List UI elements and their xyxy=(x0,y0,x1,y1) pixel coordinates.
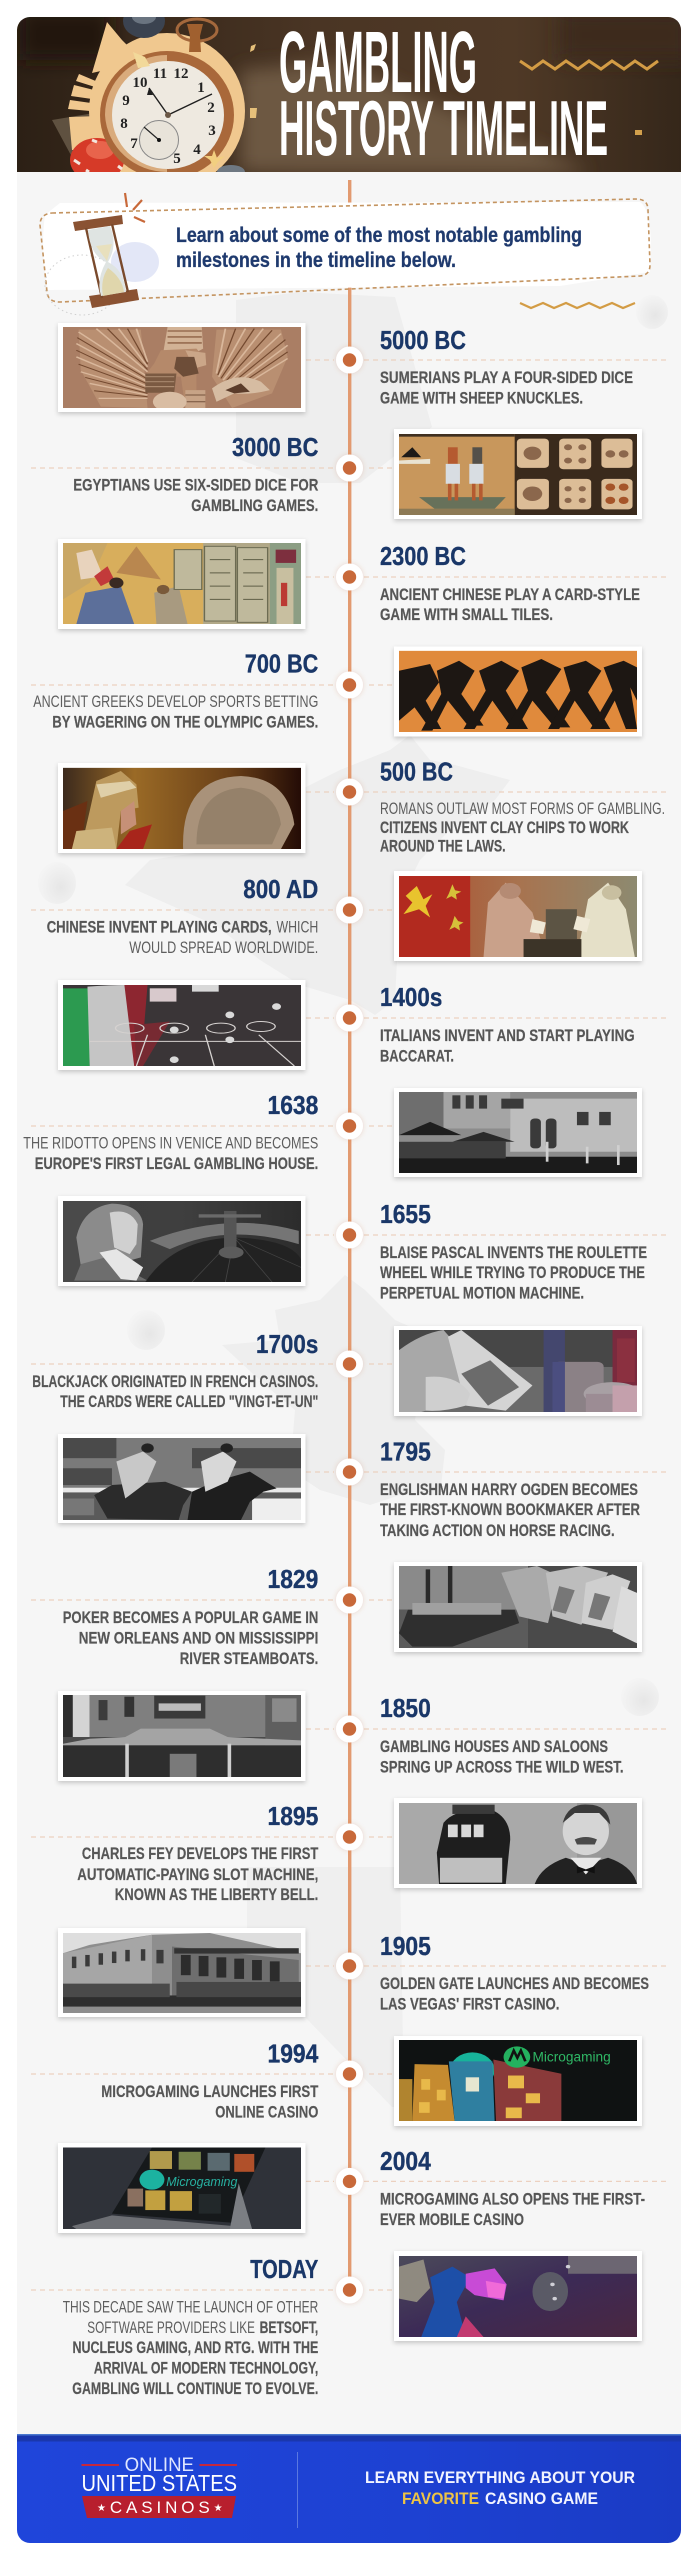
description: ARRIVAL OF MODERN TECHNOLOGY, xyxy=(94,2359,318,2378)
node xyxy=(336,896,363,924)
numerals: 10 xyxy=(132,75,148,91)
entry: 500 BC xyxy=(58,757,668,856)
year: 800 AD xyxy=(243,874,318,904)
call to action: CASINO GAME xyxy=(485,2489,598,2508)
description: CHINESE INVENT PLAYING CARDS, xyxy=(47,918,272,937)
entry: 700 BC xyxy=(31,646,642,736)
node xyxy=(336,1586,363,1614)
description: KNOWN AS THE LIBERTY BELL. xyxy=(115,1885,318,1904)
photo: Liberty Bell slot and Charles Fey xyxy=(394,1798,642,1888)
connector xyxy=(306,2180,668,2182)
year: 1700s xyxy=(256,1329,318,1359)
header banner xyxy=(17,17,681,172)
photo: Chinese tiles xyxy=(58,539,306,629)
connector xyxy=(306,1017,668,1019)
photo: horse racing xyxy=(58,1434,306,1523)
node xyxy=(336,1952,363,1980)
entry: 1994 xyxy=(31,2036,642,2126)
call to action xyxy=(365,2468,635,2508)
footer banner xyxy=(17,2434,681,2543)
description xyxy=(380,1243,647,1303)
connector xyxy=(31,1363,394,1365)
description: EVER MOBILE CASINO xyxy=(380,2210,524,2229)
node xyxy=(336,564,363,590)
description: SPRING UP ACROSS THE WILD WEST. xyxy=(380,1758,624,1777)
description xyxy=(33,692,318,732)
photo: Blaise Pascal and roulette wheel xyxy=(58,1196,306,1286)
description: SUMERIANS PLAY A FOUR-SIDED DICE xyxy=(380,368,633,387)
silver chip xyxy=(217,165,245,172)
numerals: 1 xyxy=(197,80,205,96)
node xyxy=(336,346,363,374)
year: 1829 xyxy=(268,1564,318,1594)
description: LAS VEGAS' FIRST CASINO. xyxy=(380,1995,559,2014)
entry: 3000 BC xyxy=(31,429,642,519)
description: AROUND THE LAWS. xyxy=(380,837,506,856)
entry: 1829 xyxy=(31,1562,642,1668)
year: TODAY xyxy=(250,2254,318,2284)
description: TAKING ACTION ON HORSE RACING. xyxy=(380,1521,615,1540)
numerals: 7 xyxy=(130,136,138,152)
description xyxy=(47,918,318,957)
description: NEW ORLEANS AND ON MISSISSIPPI xyxy=(79,1629,318,1648)
description: AUTOMATIC-PAYING SLOT MACHINE, xyxy=(77,1865,318,1884)
description: NUCLEUS GAMING, AND RTG. WITH THE xyxy=(72,2338,318,2357)
intro text: Learn about some of the most notable gambling xyxy=(176,224,582,247)
call to action: FAVORITE xyxy=(402,2489,479,2508)
clock hands xyxy=(149,88,212,115)
photo: blackjack hand and chips xyxy=(394,1326,642,1416)
description xyxy=(32,1372,318,1411)
map: Nevada silhouette xyxy=(247,1867,404,2107)
connector xyxy=(31,1125,394,1127)
description: GAME WITH SHEEP KNUCKLES. xyxy=(380,388,583,408)
map: China silhouette xyxy=(125,735,510,1015)
connector xyxy=(306,791,668,793)
photo: Chinese flag and card players xyxy=(394,871,642,961)
description: GAMBLING WILL CONTINUE TO EVOLVE. xyxy=(72,2379,318,2398)
year: 500 BC xyxy=(380,757,453,787)
description xyxy=(380,1026,635,1066)
description: THIS DECADE SAW THE LAUNCH OF OTHER xyxy=(63,2298,318,2316)
node xyxy=(336,2168,363,2195)
entry: 1700s xyxy=(31,1326,642,1416)
numerals: 4 xyxy=(193,142,201,158)
watch crown xyxy=(177,19,217,52)
year: 5000 BC xyxy=(380,325,466,355)
node xyxy=(336,1350,363,1378)
numerals: 2 xyxy=(207,100,215,116)
description: MICROGAMING LAUNCHES FIRST xyxy=(101,2082,319,2101)
intro text: milestones in the timeline below. xyxy=(176,249,456,272)
entry: 1905 xyxy=(58,1928,668,2017)
entry: 1795 xyxy=(58,1434,668,1540)
description: ANCIENT GREEKS DEVELOP SPORTS BETTING xyxy=(33,692,318,711)
node xyxy=(336,1004,363,1032)
node xyxy=(336,2060,363,2088)
entry: 1400s xyxy=(58,980,668,1070)
description xyxy=(380,799,665,856)
photo: Sumerian relief xyxy=(58,323,306,412)
logo: Online United States Casinos xyxy=(82,2455,237,2518)
node xyxy=(336,454,363,482)
photo: tablet with Microgaming xyxy=(58,2143,306,2233)
description xyxy=(73,476,318,515)
description: WHICH xyxy=(276,918,318,937)
logo: Online United States Casinos: ★ xyxy=(214,2503,223,2514)
connector xyxy=(31,1599,394,1601)
node xyxy=(336,2276,363,2304)
node xyxy=(336,778,363,806)
peach sunburst behind clock xyxy=(68,22,245,172)
photo: steamboat and cards xyxy=(394,1562,642,1652)
description xyxy=(380,2189,645,2229)
background paper texture xyxy=(20,10,690,172)
tablet wordmark: Microgaming xyxy=(166,2175,237,2190)
node xyxy=(336,1112,363,1140)
node xyxy=(336,1716,363,1742)
description: ONLINE CASINO xyxy=(215,2102,318,2122)
dashed border xyxy=(40,199,650,302)
year: 1795 xyxy=(380,1437,431,1467)
icon: hourglass xyxy=(73,215,139,308)
description xyxy=(77,1844,319,1904)
description: EUROPE'S FIRST LEGAL GAMBLING HOUSE. xyxy=(35,1154,318,1173)
photo: Golden Gate building xyxy=(58,1928,306,2017)
description xyxy=(380,1737,624,1777)
entry: 1638 xyxy=(23,1088,642,1177)
numerals: 9 xyxy=(122,93,130,109)
connector xyxy=(31,909,394,911)
description: GAMBLING HOUSES AND SALOONS xyxy=(380,1737,608,1756)
photo: Italian flag and baccarat table xyxy=(58,980,306,1070)
entry: 1850 xyxy=(58,1691,668,1781)
connector xyxy=(31,2073,394,2075)
connector xyxy=(306,1234,668,1236)
callout: intro xyxy=(40,193,651,315)
watch face xyxy=(112,61,224,169)
logo: Online United States Casinos: UNITED STATES xyxy=(82,2470,237,2496)
description: THE RIDOTTO OPENS IN VENICE AND BECOMES xyxy=(23,1134,318,1153)
entry: 2300 BC xyxy=(58,539,668,629)
connector xyxy=(31,2289,394,2291)
photo: Egyptian dice xyxy=(394,429,642,519)
year: 1400s xyxy=(380,982,442,1012)
entry: 1655 xyxy=(58,1196,668,1303)
entry: 2004 xyxy=(58,2143,668,2233)
description: RIVER STEAMBOATS. xyxy=(180,1649,318,1668)
entry: 800 AD xyxy=(31,871,642,961)
photo: Roman soldier and clay chip xyxy=(58,763,306,853)
numerals: 8 xyxy=(120,116,128,132)
entry: 1895 xyxy=(31,1798,642,1904)
divider xyxy=(297,2452,298,2528)
photo: saloon xyxy=(58,1691,306,1781)
year: 1655 xyxy=(380,1199,431,1229)
description: BY WAGERING ON THE OLYMPIC GAMES. xyxy=(52,713,318,732)
connector xyxy=(31,1836,394,1838)
numerals xyxy=(120,66,216,167)
entry: 5000 BC xyxy=(58,323,668,412)
description xyxy=(380,1480,640,1540)
connector xyxy=(306,1965,668,1967)
red chips xyxy=(70,138,124,172)
description: EGYPTIANS USE SIX-SIDED DICE FOR xyxy=(73,476,318,495)
year: 1850 xyxy=(380,1693,431,1723)
connector xyxy=(31,467,394,469)
description: CHARLES FEY DEVELOPS THE FIRST xyxy=(82,1844,319,1863)
watch case xyxy=(100,51,234,179)
node xyxy=(336,1222,363,1248)
glass plate xyxy=(52,114,90,155)
call to action: LEARN EVERYTHING ABOUT YOUR xyxy=(365,2468,635,2487)
year: 1905 xyxy=(380,1931,431,1961)
year: 1638 xyxy=(268,1090,318,1120)
logo: Online United States Casinos: ★ xyxy=(97,2503,106,2514)
logo: Online United States Casinos: ONLINE xyxy=(125,2455,194,2476)
year: 700 BC xyxy=(245,649,318,679)
sparkle xyxy=(133,44,642,168)
sub dial xyxy=(140,120,178,160)
logo: Online United States Casinos: CASINOS xyxy=(110,2498,210,2517)
node xyxy=(336,1458,363,1486)
numerals: 3 xyxy=(208,123,216,139)
clock illustration xyxy=(68,17,642,172)
microgaming wordmark: Microgaming xyxy=(532,2050,611,2065)
description xyxy=(23,1134,318,1173)
description xyxy=(380,585,640,624)
photo: Venice gambling house xyxy=(394,1088,642,1177)
description: POKER BECOMES A POPULAR GAME IN xyxy=(63,1608,318,1627)
year: 2300 BC xyxy=(380,541,466,571)
description: WOULD SPREAD WORLDWIDE. xyxy=(129,938,318,957)
connector xyxy=(306,359,668,361)
timeline spine xyxy=(348,180,351,2290)
entry: Today xyxy=(31,2251,642,2398)
description: BLACKJACK ORIGINATED IN FRENCH CASINOS. xyxy=(32,1372,318,1391)
connector xyxy=(306,576,668,578)
photo: VR headset xyxy=(394,2251,642,2341)
title xyxy=(280,31,607,156)
connector xyxy=(306,1471,668,1473)
node xyxy=(336,672,363,698)
description: BETSOFT, xyxy=(260,2318,318,2337)
photo: Greek runners xyxy=(394,646,642,736)
description: ITALIANS INVENT AND START PLAYING xyxy=(380,1026,635,1045)
squiggle xyxy=(520,61,658,69)
numerals: 11 xyxy=(153,66,167,82)
map: France silhouette xyxy=(222,1275,445,1505)
year: 2004 xyxy=(380,2146,431,2176)
connector xyxy=(306,1728,668,1730)
node xyxy=(336,1824,363,1850)
numerals: 12 xyxy=(174,66,188,82)
description xyxy=(380,368,633,408)
description xyxy=(63,2298,318,2398)
numerals: 5 xyxy=(173,151,181,167)
description: GAMBLING GAMES. xyxy=(191,496,318,515)
description: GAME WITH SMALL TILES. xyxy=(380,605,553,624)
photo: Microgaming slots xyxy=(394,2036,642,2126)
description: SOFTWARE PROVIDERS LIKE xyxy=(87,2318,255,2337)
year: 3000 BC xyxy=(232,432,319,462)
map: Iraq silhouette xyxy=(236,292,432,483)
squiggle lower xyxy=(520,303,635,308)
dark chip xyxy=(123,17,165,38)
description: PERPETUAL MOTION MACHINE. xyxy=(380,1284,584,1303)
year: 1895 xyxy=(268,1801,318,1831)
icon: burst lines xyxy=(125,193,145,222)
year: 1994 xyxy=(268,2038,319,2068)
lilac circle xyxy=(111,242,159,282)
decorative spheres xyxy=(38,295,668,1716)
description: BACCARAT. xyxy=(380,1047,454,1066)
description xyxy=(63,1608,318,1668)
intro text xyxy=(176,224,582,272)
dotted circle xyxy=(45,255,119,315)
description xyxy=(101,2082,319,2122)
description: THE CARDS WERE CALLED "VINGT-ET-UN" xyxy=(60,1392,318,1411)
description xyxy=(380,1974,649,2014)
connector xyxy=(31,684,394,686)
